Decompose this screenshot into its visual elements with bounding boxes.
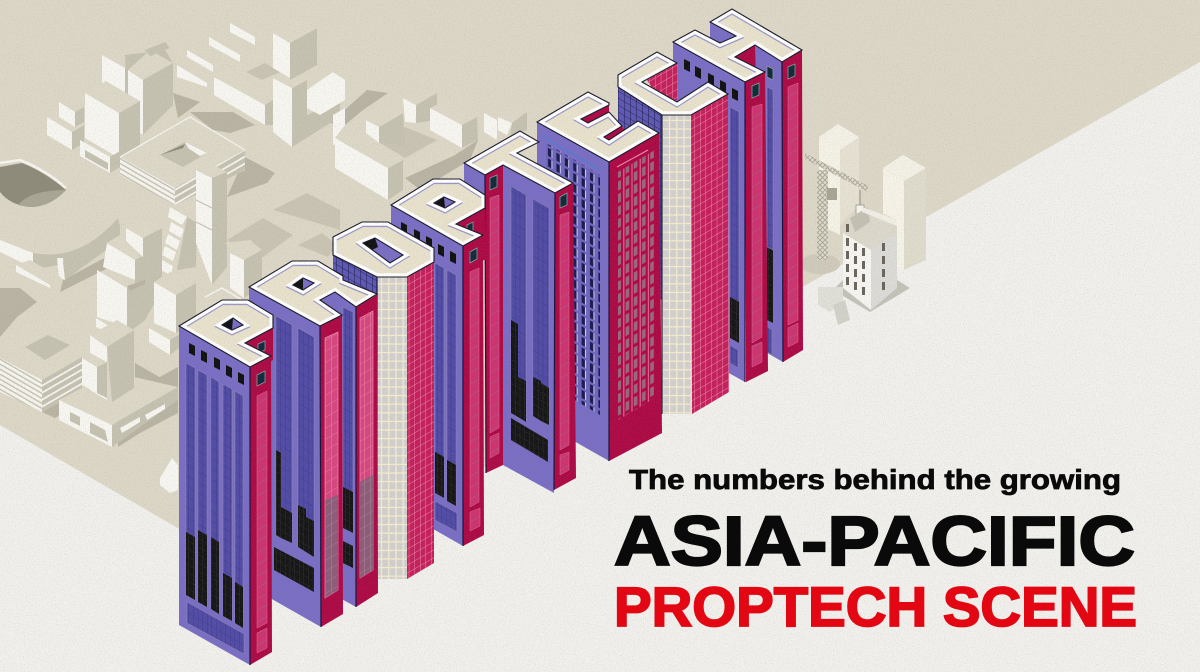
city model: stadium (0, 160, 120, 288)
city model: blocks behind the O and T (335, 88, 527, 200)
city model: south-west podium and tower (0, 312, 178, 493)
city model: striped podium (120, 117, 245, 205)
title line 1: ASIA-PACIFIC (614, 502, 1135, 580)
city model: central tower and stepped building (158, 162, 262, 312)
city model: northern tower cluster (47, 42, 173, 173)
first P roof (179, 300, 273, 368)
letter tower: O (333, 222, 434, 579)
E roof (537, 92, 659, 163)
letter tower: second P (391, 179, 487, 546)
city model: western tower group (96, 217, 197, 355)
construction site: unfinished building (818, 207, 910, 325)
construction site: glass towers (819, 124, 926, 270)
letter tower: C (618, 52, 729, 414)
C roof (618, 52, 728, 116)
ground shadows (0, 90, 478, 447)
letter tower: E (537, 92, 662, 461)
letter tower: H (673, 9, 803, 382)
H roof (673, 9, 802, 83)
construction site: crane (800, 153, 868, 274)
second P roof (391, 179, 485, 247)
letter tower: T (464, 131, 576, 493)
T roof (464, 131, 573, 194)
letter tower: R (249, 261, 378, 627)
O roof (333, 222, 434, 278)
R roof (249, 261, 377, 327)
headline text (614, 464, 1137, 638)
subtitle: The numbers behind the growing (629, 464, 1121, 495)
letter tower: first P (179, 300, 273, 665)
title line 2: PROPTECH SCENE (614, 575, 1137, 638)
city model: north-east blocks (177, 20, 345, 147)
